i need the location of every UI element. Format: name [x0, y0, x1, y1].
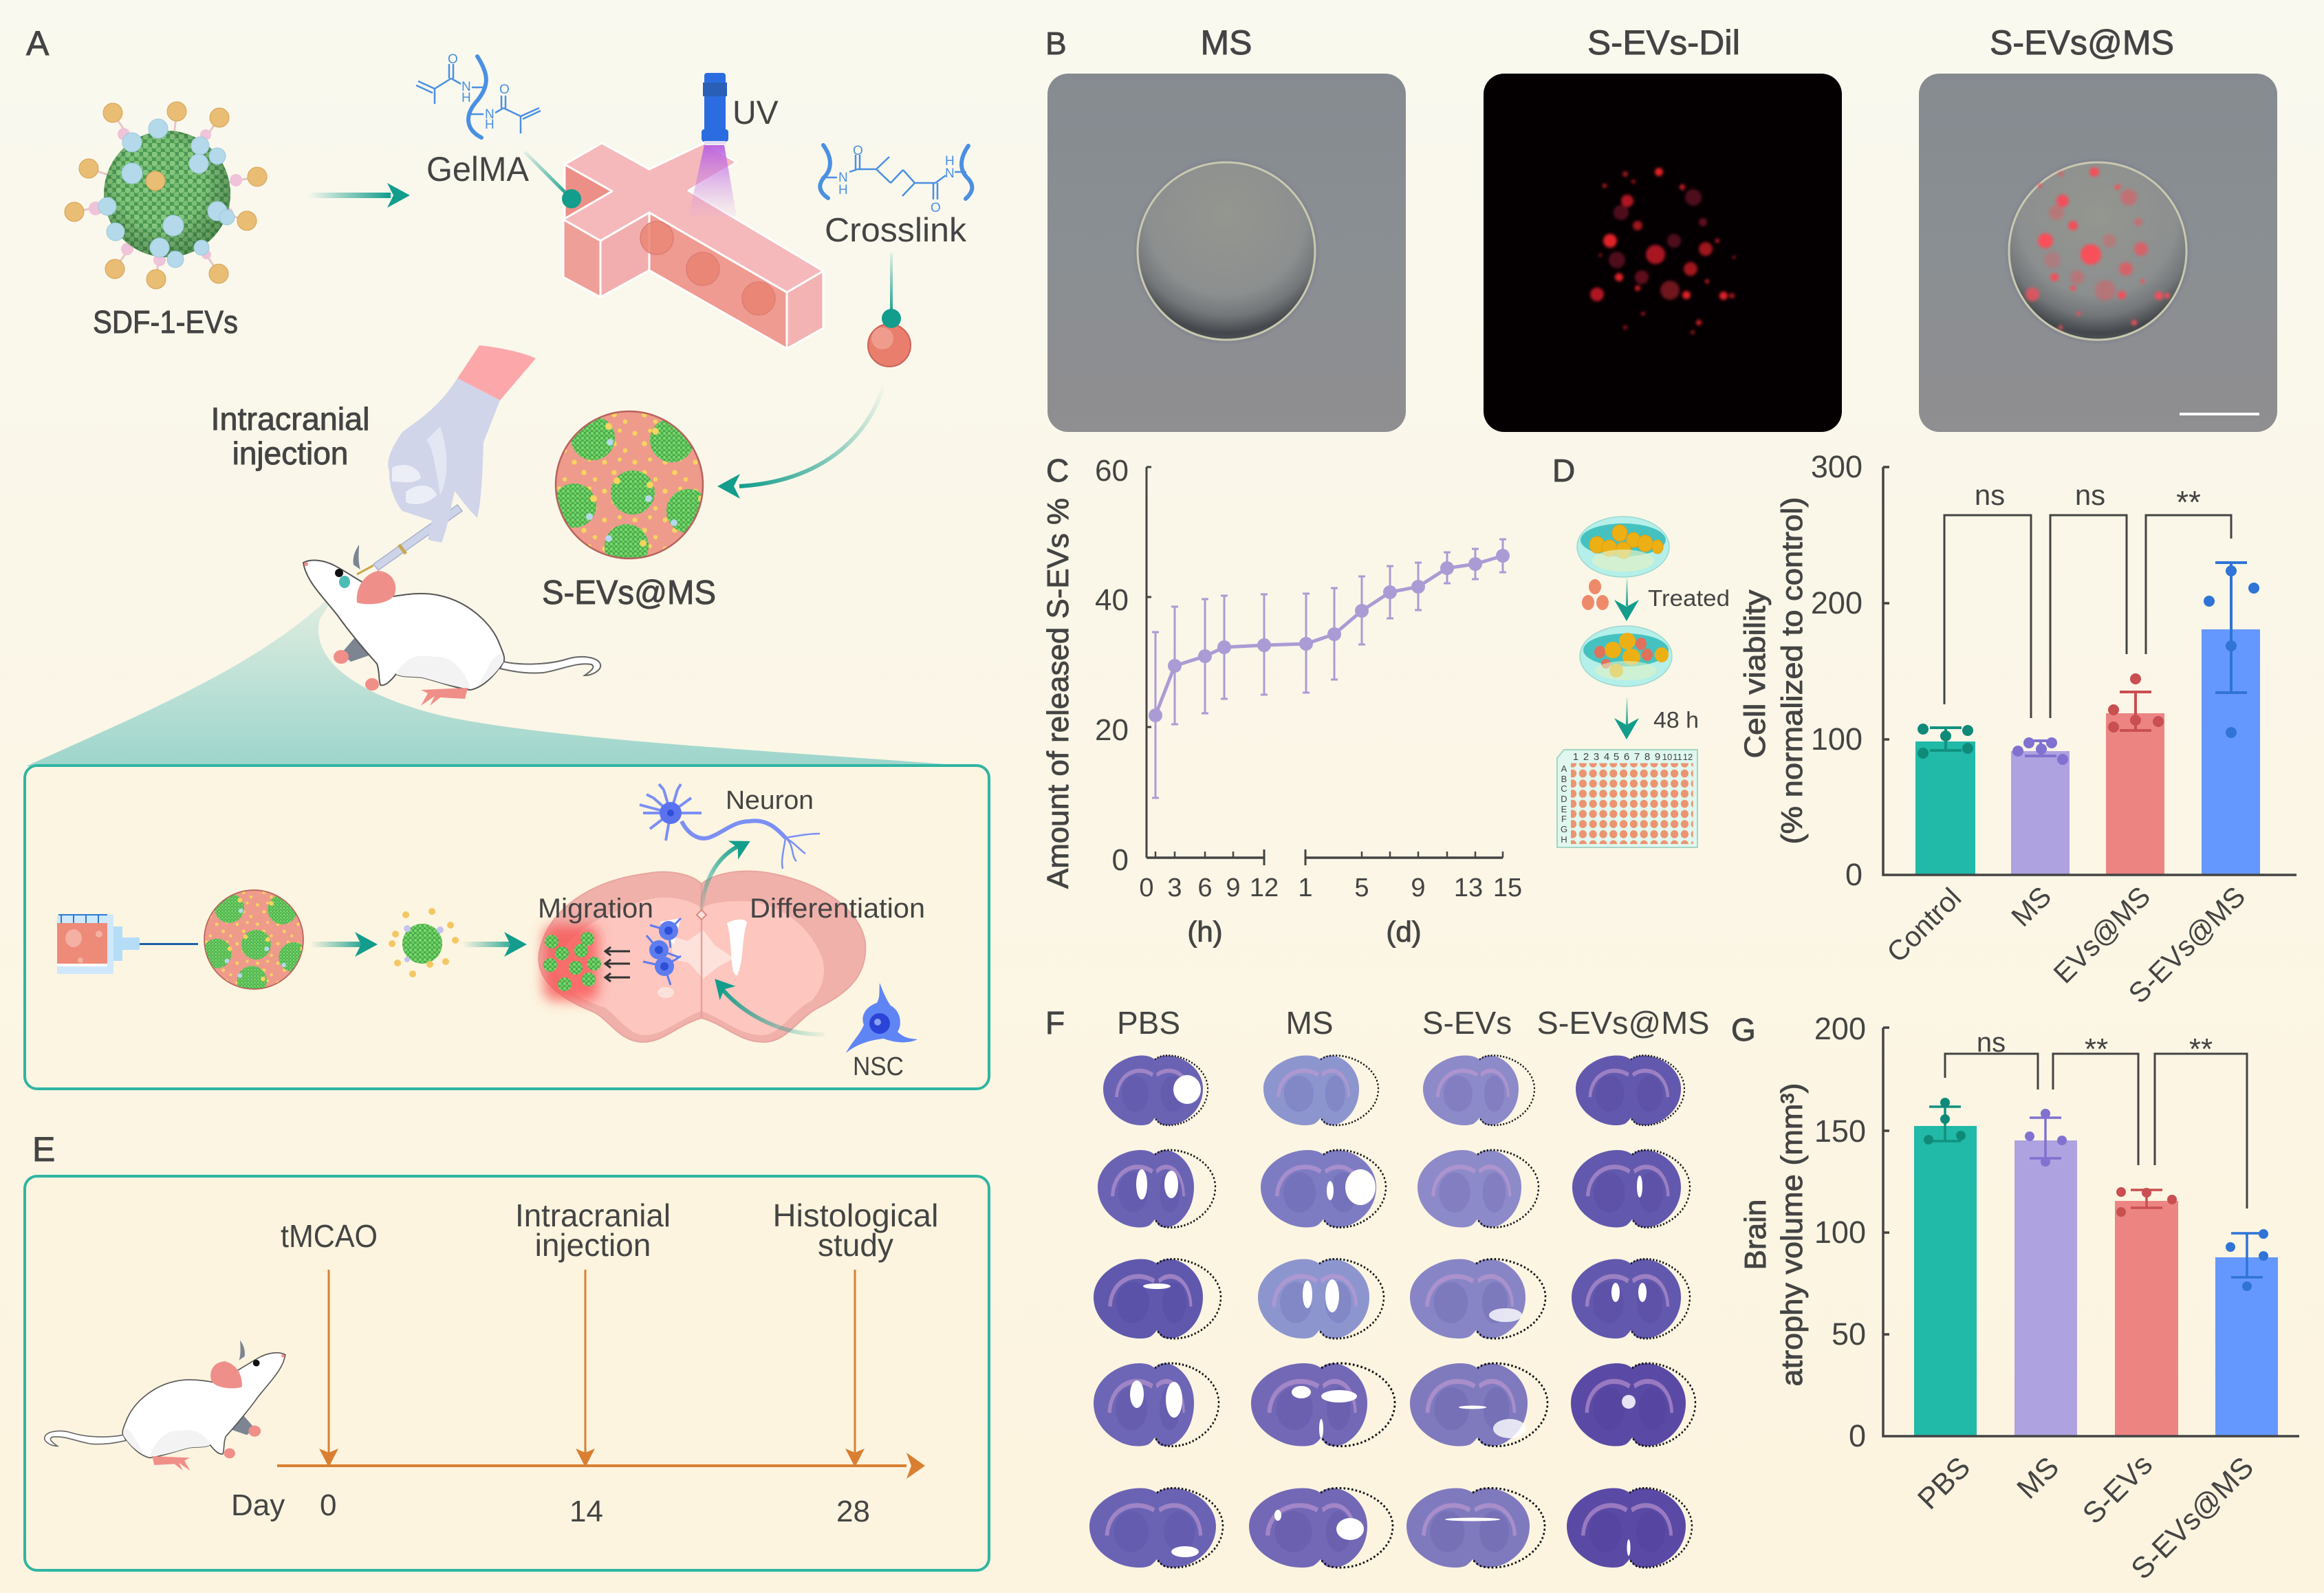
bar chart: brain atrophy volume [1739, 1011, 2299, 1586]
icon: 96-well plate: B [1561, 774, 1567, 784]
icon: 96-well plate: 1 [1573, 751, 1578, 763]
icon: SDF-1 extracellular vesicle [65, 102, 267, 289]
MS points [2012, 737, 2068, 765]
x tick labels [1911, 1448, 2260, 1586]
icon: 96-well plate: H [1561, 834, 1567, 845]
y tick labels: 0 [1845, 857, 1863, 892]
label: Day: Day [231, 1488, 285, 1522]
y tick labels: 40 [1095, 583, 1129, 617]
label: Histological study: study [818, 1227, 893, 1263]
x tick labels: MS [2005, 880, 2057, 933]
significance labels [1975, 479, 2201, 520]
icon: GelMA molecule: O [499, 83, 510, 97]
label: Intracranial injection: injection [535, 1227, 651, 1263]
unit labels: (d) [1386, 915, 1422, 948]
label: Intracranial injection [210, 401, 370, 471]
icon: GelMA molecule: H [485, 118, 495, 132]
icon: 96-well plate: A [1561, 763, 1567, 774]
row 1 [1103, 1055, 1684, 1125]
migration arrows [605, 947, 630, 982]
icon: 96-well plate: 2 [1583, 751, 1589, 763]
migrating neural stem cells [643, 918, 681, 985]
icon: 96-well plate: D [1561, 794, 1567, 804]
icon: 96-well plate: C [1561, 783, 1567, 794]
panel: experimental timeline [25, 1176, 989, 1570]
x tick labels [1139, 874, 1522, 902]
icon: crosslink molecule: N [838, 171, 848, 185]
S-EVs@MS points [2226, 1229, 2268, 1291]
arrow: EVs to GelMA [308, 183, 410, 208]
x tick labels: PBS [1911, 1451, 1977, 1516]
label: Treated: Treated [1648, 585, 1730, 611]
x tick labels: 3 [1167, 874, 1182, 902]
icon: 96-well plate: 5 [1614, 751, 1619, 763]
data line [1155, 556, 1503, 715]
label: Histological study [773, 1198, 938, 1263]
significance labels: ns [1975, 479, 2005, 511]
error bars [1930, 563, 2247, 756]
icon: injection hand [357, 345, 536, 574]
y tick labels: 200 [1811, 585, 1863, 620]
y tick labels: 300 [1811, 449, 1863, 484]
heading: MS: MS [1201, 23, 1252, 62]
panel: in vivo mechanism [25, 766, 989, 1089]
y tick labels: 0 [1112, 843, 1129, 877]
column heading: MS: MS [1286, 1005, 1333, 1041]
icon: mouse [45, 1341, 285, 1471]
arrow: NSC to brain [707, 972, 825, 1034]
x tick labels: S-EVs@MS [2125, 1451, 2260, 1586]
y axis title: Amount of released S-EVs % [1041, 498, 1075, 889]
y tick labels [1814, 1011, 1866, 1453]
y tick labels [1811, 449, 1863, 892]
icon: crosslink molecule: O [853, 144, 863, 158]
PBS points [1924, 1098, 1966, 1145]
icon: neuron [640, 784, 820, 869]
icon: crosslink molecule: H [945, 154, 955, 169]
y tick labels: 150 [1814, 1114, 1866, 1149]
y tick labels [1095, 454, 1129, 877]
y axis title: Brain [1739, 1200, 1772, 1270]
data points [1918, 724, 1973, 759]
label: 48 h: 48 h [1653, 707, 1699, 733]
unit labels: (h) [1187, 915, 1223, 948]
error bars [1929, 1107, 2263, 1277]
row 4 [1094, 1363, 1695, 1446]
micrograph: S-EVs@MS merged [1919, 74, 2277, 432]
bar chart: cell viability [1739, 449, 2296, 1009]
icon: 96-well plate: 12 [1683, 752, 1693, 762]
icon: crosslink molecule: N [945, 166, 955, 181]
icon: neural stem cell [846, 983, 917, 1053]
icon: crosslink molecule: O [931, 201, 941, 215]
icon: 96-well plate: 3 [1594, 751, 1599, 763]
significance labels: ** [2189, 1032, 2213, 1066]
y axis title [1739, 1083, 1809, 1387]
icon: GelMA molecule [416, 52, 541, 138]
x tick labels: MS [2011, 1451, 2065, 1506]
arrow: day 28 [845, 1270, 865, 1467]
y axis title: atrophy volume (mm³) [1775, 1083, 1809, 1387]
label: tMCAO: tMCAO [281, 1218, 378, 1254]
label: Intracranial injection [515, 1198, 671, 1263]
panel F label: F [1045, 1005, 1065, 1041]
icon: 96-well plate: 4 [1604, 751, 1609, 763]
panel B label: B [1045, 25, 1067, 61]
icon: crosslink molecule [820, 144, 972, 215]
panel A label: A [26, 24, 50, 63]
icon: cross microfluidic chip [563, 143, 823, 349]
label: Migration: Migration [538, 893, 653, 924]
icon: treated dish [1580, 626, 1672, 686]
arrow: 48 h [1614, 698, 1639, 739]
y tick labels: 100 [1814, 1215, 1866, 1250]
significance labels: ** [2085, 1032, 2108, 1066]
infarct region with EVs [543, 925, 601, 1001]
brain histology grid [1089, 1055, 1695, 1568]
panel D label: D [1552, 453, 1575, 488]
significance labels: ** [2176, 484, 2201, 520]
arrow: droplet to S-EVs@MS [717, 383, 884, 499]
y axis title: (% normalized to control) [1776, 497, 1809, 845]
row 5 [1089, 1488, 1692, 1568]
panel G label: G [1731, 1012, 1756, 1048]
y axis [1147, 467, 1151, 858]
label: GelMA: GelMA [426, 150, 530, 188]
label: Intracranial injection: Intracranial [515, 1198, 671, 1233]
x tick labels: S-EVs@MS [2122, 880, 2251, 1009]
icon: syringe [57, 915, 198, 974]
icon: culture dish [1577, 517, 1669, 577]
significance brackets [1945, 1054, 2247, 1209]
MS points [2025, 1109, 2067, 1167]
line chart: S-EVs release [1041, 454, 1522, 948]
cell culture schematic [1557, 517, 1730, 847]
significance labels: ns [1977, 1028, 2006, 1058]
column heading: S-EVs@MS: S-EVs@MS [1536, 1005, 1710, 1041]
label: SDF-1-EVs: SDF-1-EVs [93, 304, 238, 340]
y axis title [1739, 497, 1809, 845]
label: day 28: 28 [836, 1495, 870, 1528]
row 2 [1098, 1150, 1690, 1228]
label: Intracranial injection: injection [232, 435, 348, 471]
icon: released EV [389, 908, 459, 977]
error bars [1152, 539, 1506, 798]
connector and droplet [868, 253, 911, 367]
arrow: day 0 [319, 1270, 338, 1467]
y tick labels: 60 [1095, 454, 1129, 488]
arrow: treated [1614, 578, 1639, 621]
icon: 96-well plate: 10 [1662, 752, 1672, 762]
teal wedge zoom from mouse to panel [26, 582, 963, 766]
icon: 96-well plate: 7 [1634, 751, 1640, 763]
y axis title: Cell viability [1739, 589, 1772, 758]
x tick labels: 0 [1139, 874, 1154, 902]
x tick labels: EVs@MS [2048, 880, 2156, 989]
icon: microsphere [202, 889, 308, 995]
label: Differentiation: Differentiation [750, 893, 925, 924]
label: day 0: 0 [320, 1488, 336, 1522]
x tick labels: 13 [1454, 874, 1483, 902]
x tick labels: 15 [1493, 874, 1522, 902]
icon: 96-well plate [1557, 750, 1697, 847]
micrograph: MS bright field [1047, 74, 1406, 432]
x tick labels: S-EVs [2076, 1448, 2159, 1530]
icon: GelMA molecule: H [461, 91, 471, 105]
connector: GelMA to chip [525, 152, 581, 208]
heading: S-EVs-Dil: S-EVs-Dil [1587, 23, 1740, 62]
label: Histological study: Histological [773, 1198, 938, 1233]
y tick labels: 100 [1811, 722, 1863, 757]
arrow: timeline axis [277, 1453, 925, 1479]
heading: S-EVs@MS: S-EVs@MS [1990, 23, 2174, 62]
x tick labels: 9 [1226, 874, 1241, 902]
icon: 96-well plate: 9 [1655, 751, 1660, 763]
column heading: S-EVs: S-EVs [1422, 1005, 1512, 1041]
scale bar [2180, 413, 2259, 415]
arrow: day 14 [576, 1270, 595, 1467]
icon: 96-well plate: E [1561, 804, 1567, 814]
arrow: differentiation to neuron [697, 832, 755, 920]
y tick labels: 200 [1814, 1011, 1866, 1046]
label: S-EVs@MS: S-EVs@MS [542, 574, 716, 611]
column heading: PBS: PBS [1117, 1005, 1180, 1041]
row 3 [1094, 1259, 1690, 1339]
x tick labels: 12 [1250, 874, 1279, 902]
icon: 96-well plate: 11 [1673, 752, 1682, 762]
y tick labels: 0 [1849, 1418, 1866, 1453]
arrow: release [310, 932, 378, 957]
label: UV: UV [732, 95, 779, 131]
unit labels [1187, 915, 1422, 948]
bars [1914, 1126, 2278, 1436]
arrow: to brain [462, 932, 527, 957]
x tick labels: 1 [1298, 874, 1313, 902]
EVs@MS points [2108, 673, 2164, 733]
x tick labels: 9 [1411, 874, 1426, 902]
icon: GelMA molecule: O [448, 52, 458, 67]
S-EVs points [2116, 1187, 2177, 1217]
axes [1883, 467, 2296, 875]
significance labels: ns [2075, 479, 2105, 511]
x tick labels [1880, 880, 2251, 1009]
label: Intracranial injection: Intracranial [210, 401, 370, 437]
label: NSC: NSC [853, 1052, 904, 1081]
marker on mouse head [339, 576, 350, 588]
icon: 96-well plate: G [1561, 824, 1567, 834]
x axis [1147, 849, 1503, 865]
y tick labels: 50 [1832, 1316, 1866, 1352]
icon: 96-well plate: 8 [1644, 751, 1650, 763]
axes [1883, 1028, 2299, 1436]
icon: UV lamp and beam [688, 73, 737, 216]
y tick labels: 20 [1095, 713, 1129, 747]
icon: coronal brain [539, 871, 865, 1042]
panel C label: C [1046, 453, 1069, 488]
label: Neuron: Neuron [726, 786, 814, 815]
significance labels [1977, 1028, 2213, 1066]
x tick labels: Control [1880, 882, 1967, 968]
icon: crosslink molecule: H [838, 183, 848, 197]
bars [1915, 629, 2260, 875]
icon: GelMA molecule: N [485, 107, 495, 122]
label: Crosslink: Crosslink [825, 212, 967, 249]
icon: S-EVs@MS microsphere [552, 411, 710, 568]
icon: GelMA molecule: N [461, 80, 471, 94]
label: day 14: 14 [569, 1495, 603, 1528]
significance brackets [1944, 515, 2231, 718]
x tick labels: 5 [1354, 874, 1369, 902]
icon: 96-well plate: F [1561, 814, 1567, 824]
micrograph: Dil fluorescence [1484, 74, 1842, 432]
x tick labels: 6 [1197, 874, 1213, 902]
data points [1149, 549, 1510, 722]
icon: mouse receiving injection [303, 545, 600, 706]
panel E label: E [32, 1130, 55, 1169]
icon: 96-well plate: 6 [1624, 751, 1629, 763]
S-EVs@MS points [2204, 565, 2259, 738]
icon: treated cells [1582, 579, 1609, 610]
